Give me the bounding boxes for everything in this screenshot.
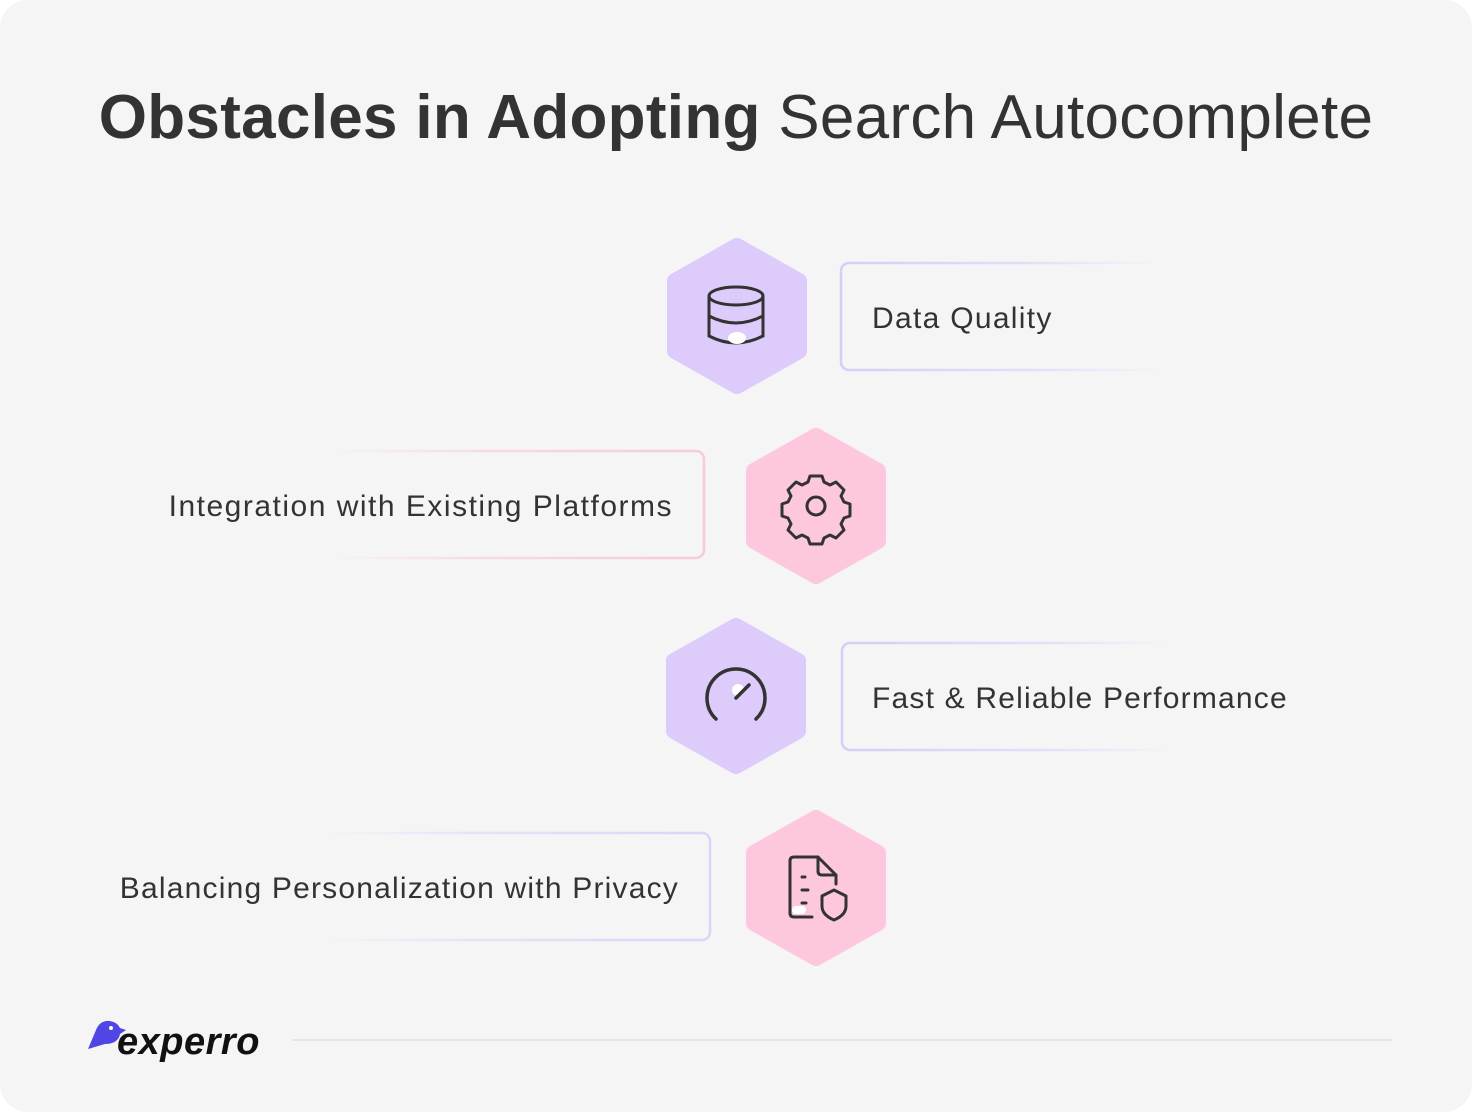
label box: Integration with Existing Platforms xyxy=(169,490,673,523)
hexagon: database xyxy=(675,246,799,386)
label box xyxy=(120,833,710,940)
hexagon: document shield xyxy=(754,818,878,958)
hexagon: speedometer xyxy=(674,626,798,766)
label box: Data Quality xyxy=(872,302,1053,335)
item 3: Performance xyxy=(674,626,1288,766)
label box: Fast & Reliable Performance xyxy=(872,682,1288,715)
logo: experro xyxy=(117,1021,260,1063)
item 1: Data Quality xyxy=(675,246,1161,386)
label box: Balancing Personalization with Privacy xyxy=(120,872,679,905)
label box xyxy=(841,263,1161,370)
title: Obstacles in Adopting Search Autocomplete xyxy=(99,83,1373,152)
item 4: Privacy xyxy=(120,818,878,958)
label box xyxy=(169,451,704,558)
label box xyxy=(842,643,1288,750)
item 2: Integration xyxy=(169,436,878,576)
hexagon: gear xyxy=(754,436,878,576)
